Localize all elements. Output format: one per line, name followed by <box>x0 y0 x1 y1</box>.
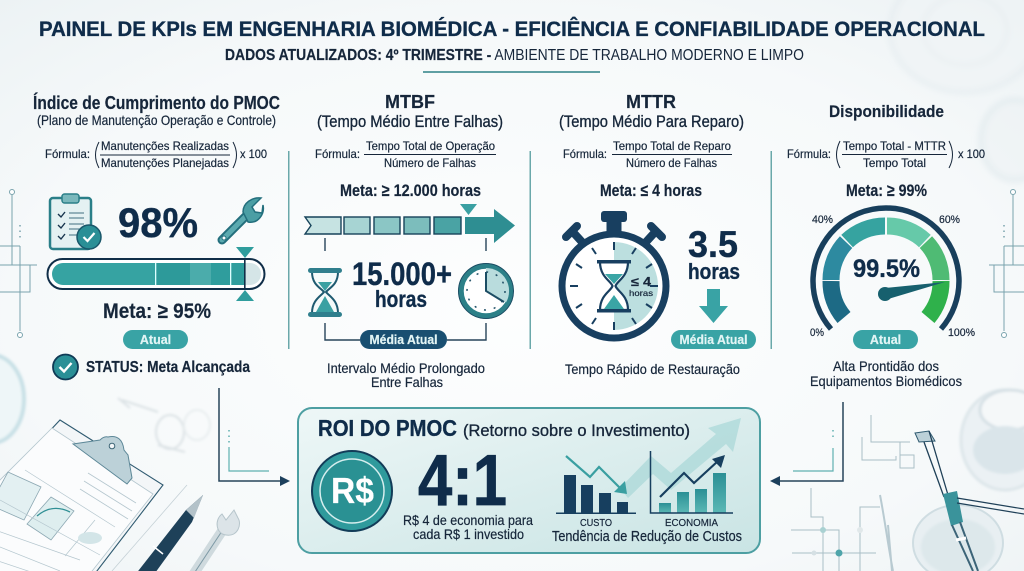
illustration: petri dish <box>913 505 1003 571</box>
heading: ROI: ROI DO PMOC <box>318 415 457 441</box>
decoration: blurred glasses <box>118 398 210 452</box>
caption: ROI: cada R$ 1 investido <box>413 526 524 542</box>
heading: MTTR: MTTR <box>626 92 676 112</box>
formula: PMOC: Fórmula: <box>45 147 90 161</box>
badge: Atual gauge: Atual <box>870 333 901 347</box>
icon: clock <box>458 264 514 318</box>
formula: PMOC <box>45 139 267 170</box>
caption: ROI <box>403 512 533 542</box>
caption: Disponibilidade <box>810 358 962 389</box>
subheading: MTBF: (Tempo Médio Entre Falhas) <box>317 113 503 131</box>
gauge segments <box>831 226 941 318</box>
gauge <box>810 208 975 339</box>
formula: MTTR: Fórmula: <box>563 147 607 161</box>
formula: Disponibilidade: Tempo Total <box>863 156 926 170</box>
heading: MTBF: MTBF <box>385 92 435 112</box>
decoration: right circuit lines <box>989 190 1024 338</box>
arrow: right connector to ROI <box>770 402 843 486</box>
panel: MTBF <box>305 92 515 390</box>
caption: Disponibilidade: Equipamentos Biomédicos <box>810 373 962 389</box>
chart: custo <box>556 456 636 514</box>
target: MTBF: Meta: ≥ 12.000 horas <box>340 181 481 200</box>
title underline <box>423 71 600 73</box>
icon: R$ coin: R$ <box>331 470 374 511</box>
timeline arrow <box>305 204 515 243</box>
badge: Media Atual dark: Média Atual <box>370 333 438 347</box>
hourglass inside stopwatch <box>597 260 631 312</box>
arrow: down <box>699 289 728 323</box>
subtitle: DADOS ATUALIZADOS: 4º TRIMESTRE - AMBIENTE DE TRABALHO MODERNO E LIMPO <box>225 47 804 64</box>
formula: MTTR: Número de Falhas <box>626 156 717 170</box>
status: meta alcancada: STATUS: Meta Alcançada <box>86 359 250 376</box>
formula: MTTR: Tempo Total de Reparo <box>613 139 731 153</box>
icon: hourglass <box>308 268 342 317</box>
gauge needle <box>878 282 945 301</box>
caption: MTBF: Intervalo Médio Prolongado <box>327 360 485 376</box>
icon: R$ coin <box>312 451 392 531</box>
illustration: lab instrument <box>915 431 1024 571</box>
icon: stopwatch: horas <box>629 288 653 298</box>
panel: PMOC compliance <box>33 92 280 380</box>
icon: wrench <box>222 198 263 240</box>
panel: ROI <box>298 408 760 553</box>
value: 15.000+ horas: 15.000+ <box>352 256 452 292</box>
badge: Atual: Atual <box>140 333 171 347</box>
badge: Atual gauge <box>853 330 918 349</box>
formula: Disponibilidade: x 100 <box>958 147 985 161</box>
badge: Media Atual dark <box>360 330 447 349</box>
caption: MTBF: Entre Falhas <box>371 374 443 390</box>
caption: trend: Tendência de Redução de Custos <box>552 529 742 545</box>
formula: MTBF: Número de Falhas <box>384 156 476 170</box>
value: 3.5 horas: 3.5 <box>688 224 738 265</box>
arrow: left connector to ROI <box>219 388 290 486</box>
formula: Disponibilidade <box>787 139 985 170</box>
bracket lines <box>325 238 486 340</box>
caption: ROI: R$ 4 de economia para <box>403 512 533 528</box>
target: Disponibilidade: Meta: ≥ 99% <box>846 181 927 200</box>
gauge labels: 40% <box>812 214 833 226</box>
progress bar <box>48 247 264 301</box>
formula: MTBF <box>315 139 496 170</box>
gauge labels: 0% <box>810 327 824 339</box>
decoration: lower right circuit lines <box>791 415 914 571</box>
illustration: pen <box>135 495 203 571</box>
formula: PMOC: Manutenções Realizadas <box>101 139 229 153</box>
badge: Media Atual <box>671 330 756 349</box>
formula: PMOC: Manutenções Planejadas <box>101 156 229 170</box>
value: 3.5 horas: horas <box>688 259 740 284</box>
illustration: lab jar <box>961 390 1024 490</box>
heading: Disponibilidade: Disponibilidade <box>829 102 944 121</box>
panel: Disponibilidade <box>787 102 985 389</box>
subheading: MTTR: (Tempo Médio Para Reparo) <box>559 113 744 131</box>
arrow: pale rising trend <box>620 418 741 498</box>
subheading: PMOC: (Plano de Manutenção Operação e Controle) <box>37 112 276 128</box>
formula: Disponibilidade: Tempo Total - MTTR <box>843 139 946 153</box>
labels: custo economia: CUSTO <box>580 518 612 529</box>
target: PMOC: Meta: ≥ 95% <box>103 300 211 323</box>
caption: Disponibilidade: Alta Prontidão dos <box>833 358 939 374</box>
status: meta alcancada <box>53 354 250 380</box>
decoration: left circuit lines <box>0 190 37 338</box>
badge: Atual <box>123 330 188 349</box>
value: 4:1: 4:1 <box>418 441 507 521</box>
icon: clipboard checklist <box>50 194 101 249</box>
formula: MTBF: Tempo Total de Operação <box>366 139 495 153</box>
decoration: glass dishes top right <box>890 0 1024 180</box>
formula: MTBF: Fórmula: <box>315 147 360 161</box>
value: 3.5 horas <box>688 224 740 284</box>
labels: custo economia <box>580 518 718 529</box>
gauge labels: 60% <box>939 214 960 226</box>
subheading: ROI: (Retorno sobre o Investimento) <box>463 422 690 440</box>
gauge labels: 100% <box>948 327 975 339</box>
gauge: 99.5% <box>853 255 920 283</box>
labels: custo economia: ECONOMIA <box>665 518 718 529</box>
caption: MTBF <box>327 360 485 390</box>
illustration: wrench <box>193 510 240 571</box>
gauge labels <box>810 214 975 339</box>
icon: stopwatch: ≤ 4 <box>631 275 651 289</box>
formula: PMOC: x 100 <box>240 147 267 161</box>
chart: economia <box>650 451 733 513</box>
illustration: clipboard <box>0 420 187 571</box>
icon: stopwatch <box>562 211 666 338</box>
heading: PMOC: Índice de Cumprimento do PMOC <box>33 92 280 113</box>
target: MTTR: Meta: ≤ 4 horas <box>600 181 702 200</box>
caption: MTTR: Tempo Rápido de Restauração <box>565 361 740 377</box>
decoration: left dish <box>0 355 24 443</box>
column dividers <box>288 151 772 349</box>
value: 15.000+ horas <box>352 256 452 312</box>
panel: MTTR <box>559 92 756 377</box>
formula: MTTR <box>563 139 732 170</box>
value: 15.000+ horas: horas <box>375 286 427 312</box>
gauge outer arc <box>813 208 959 329</box>
value: 98%: 98% <box>118 199 198 246</box>
title: PAINEL DE KPIs EM ENGENHARIA BIOMÉDICA - EFICIÊNCIA E CONFIABILIDADE OPERACIONAL <box>39 17 985 41</box>
formula: Disponibilidade: Fórmula: <box>787 147 831 161</box>
badge: Media Atual: Média Atual <box>680 333 748 347</box>
